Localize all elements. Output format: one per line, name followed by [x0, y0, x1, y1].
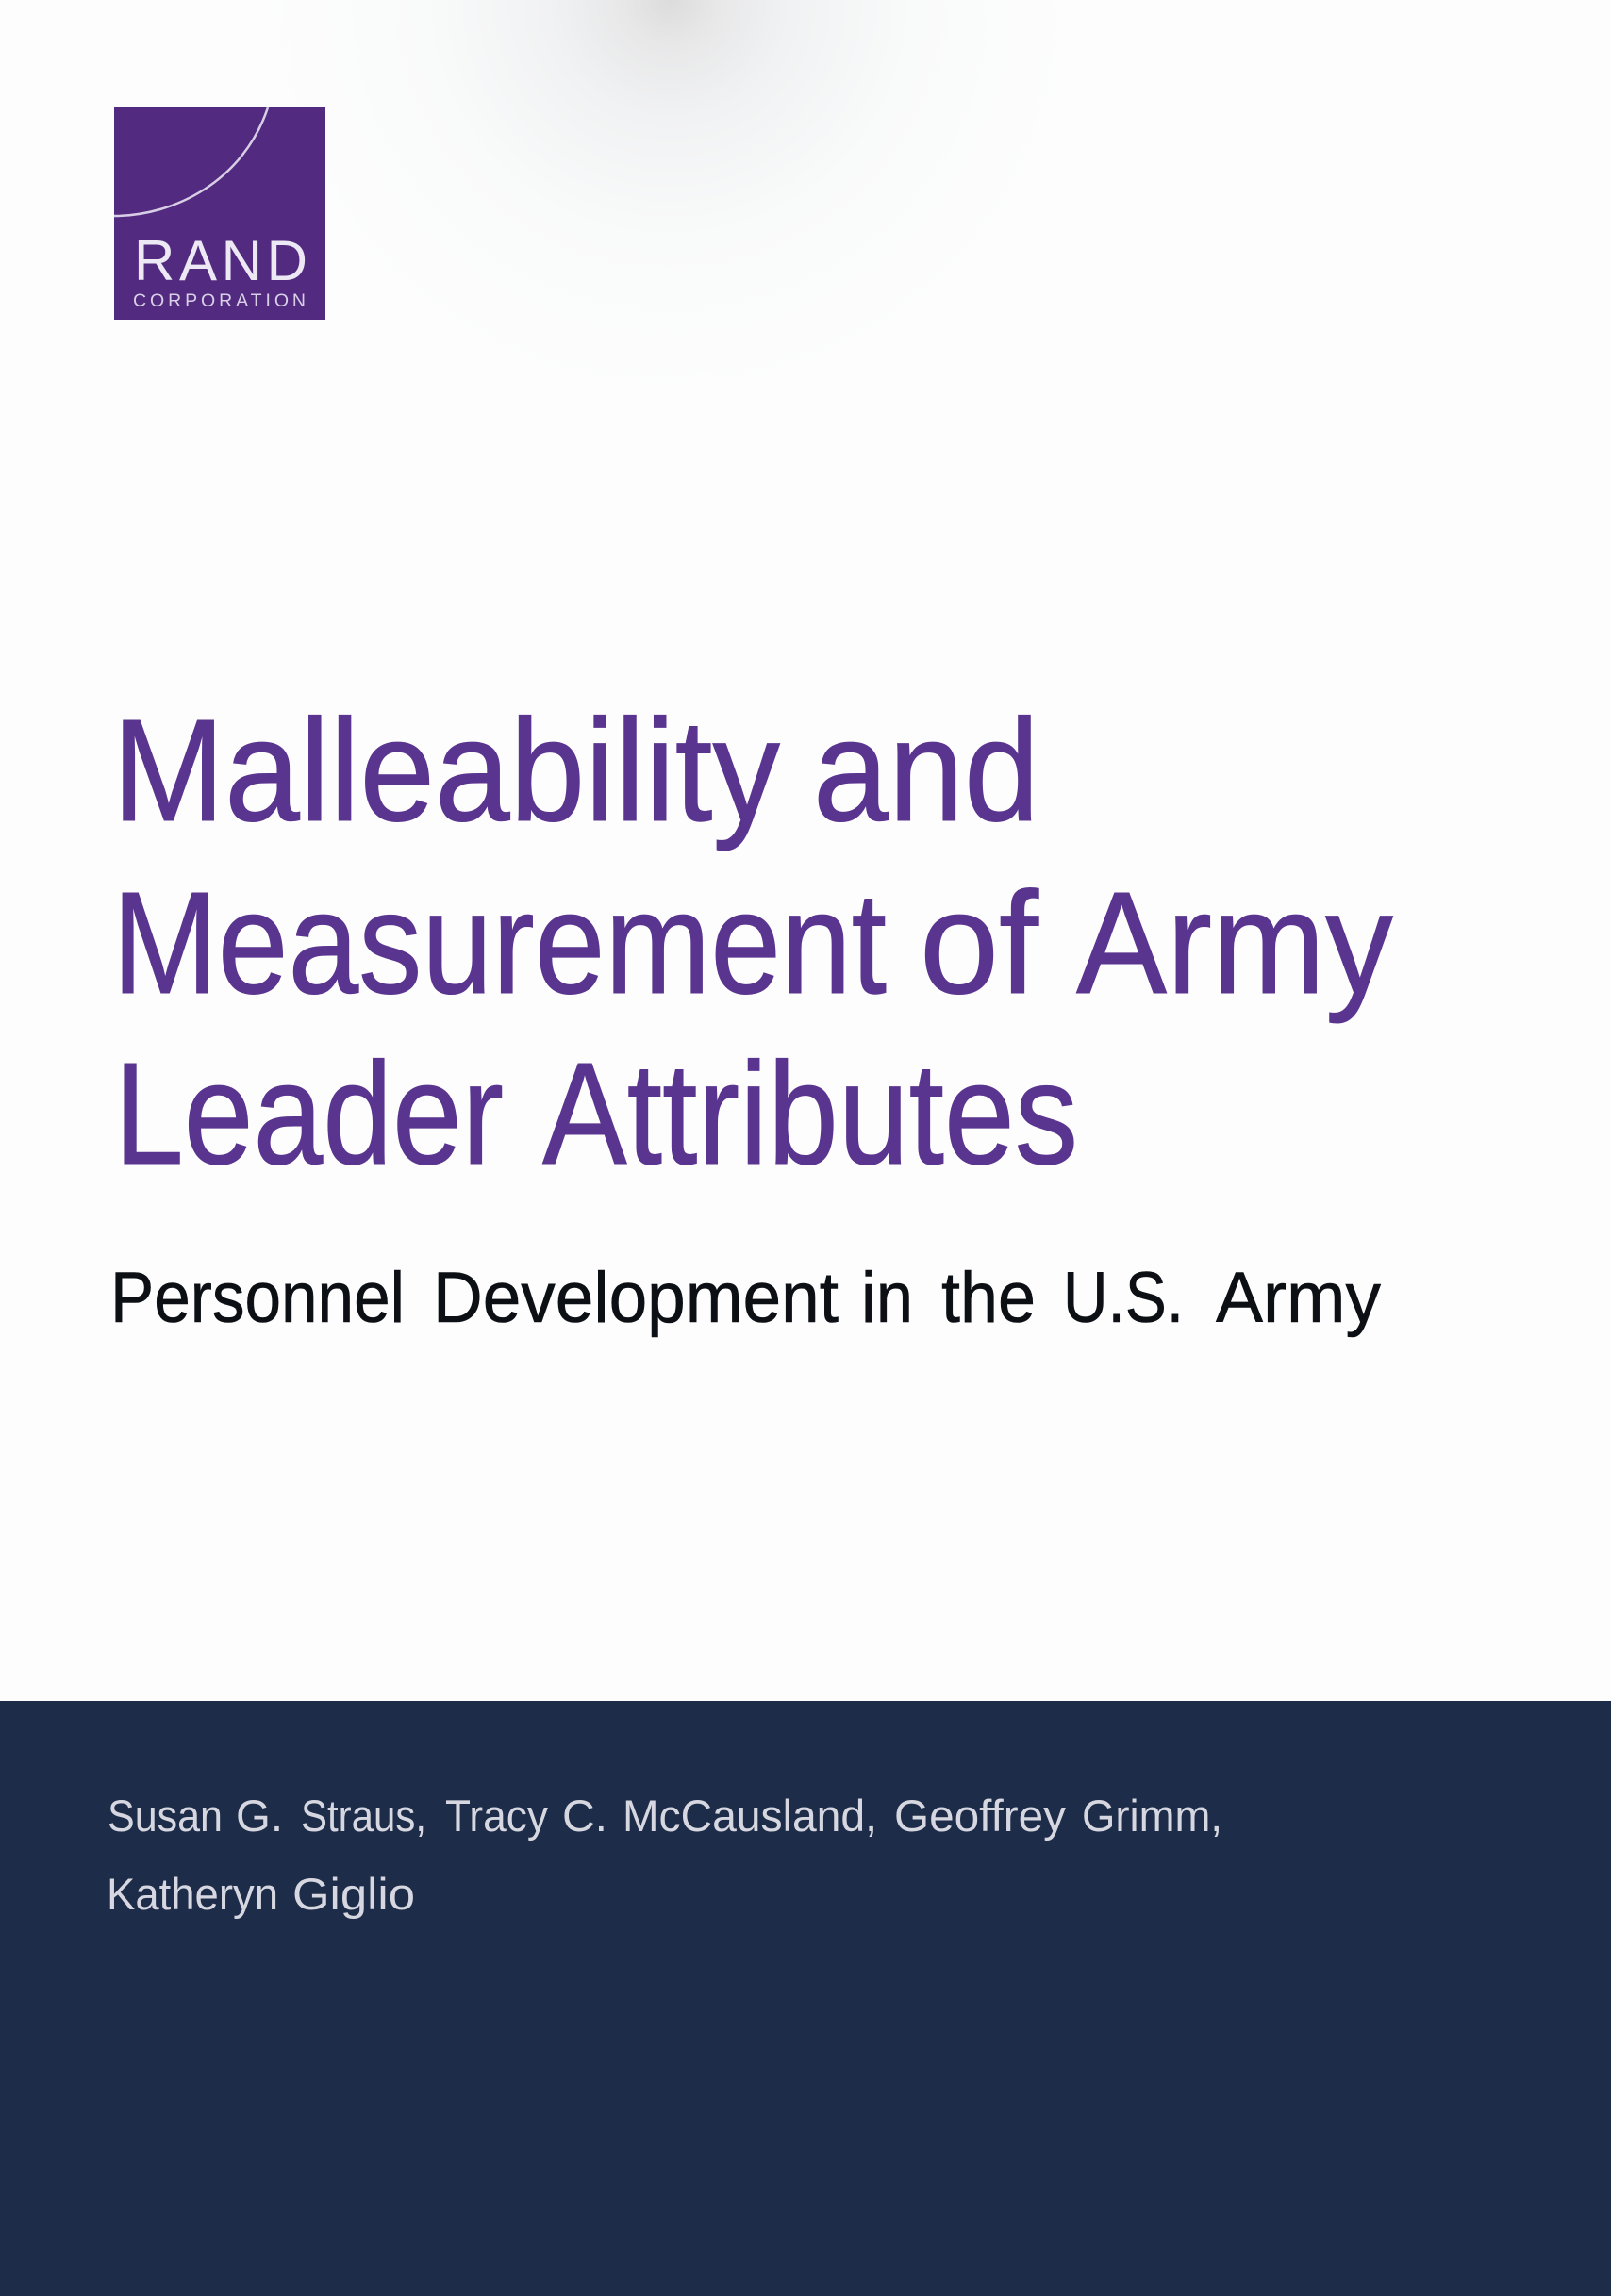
title: and — [813, 689, 1039, 851]
authors: Giglio — [292, 1869, 415, 1919]
authors: Susan — [108, 1791, 223, 1841]
subtitle: U.S. — [1063, 1258, 1184, 1338]
subtitle: in — [861, 1258, 913, 1338]
authors: G. — [236, 1791, 283, 1841]
authors: C. — [562, 1791, 607, 1841]
authors: Geoffrey — [894, 1791, 1066, 1841]
subtitle — [110, 1258, 1381, 1338]
subtitle: the — [941, 1258, 1036, 1338]
logo: RAND Corporation: RAND — [134, 229, 307, 292]
authors: Grimm, — [1082, 1791, 1222, 1841]
authors: Katheryn — [107, 1869, 278, 1919]
author band — [0, 1701, 1611, 2296]
logo: RAND Corporation: CORPORATION — [133, 290, 306, 311]
logo: RAND Corporation — [114, 107, 325, 320]
title — [112, 689, 1393, 1195]
title: Army — [1076, 862, 1393, 1024]
subtitle: Personnel — [110, 1258, 405, 1338]
authors: McCausland, — [623, 1791, 877, 1841]
title: of — [920, 862, 1039, 1024]
title: Malleability — [112, 689, 780, 851]
subtitle: Development — [433, 1258, 839, 1338]
subtitle: Army — [1216, 1258, 1381, 1338]
title: Measurement — [112, 862, 887, 1024]
authors — [107, 1791, 1222, 1919]
title: Attributes — [542, 1032, 1078, 1195]
authors: Tracy — [445, 1791, 548, 1841]
title: Leader — [114, 1032, 504, 1195]
authors: Straus, — [301, 1791, 426, 1841]
